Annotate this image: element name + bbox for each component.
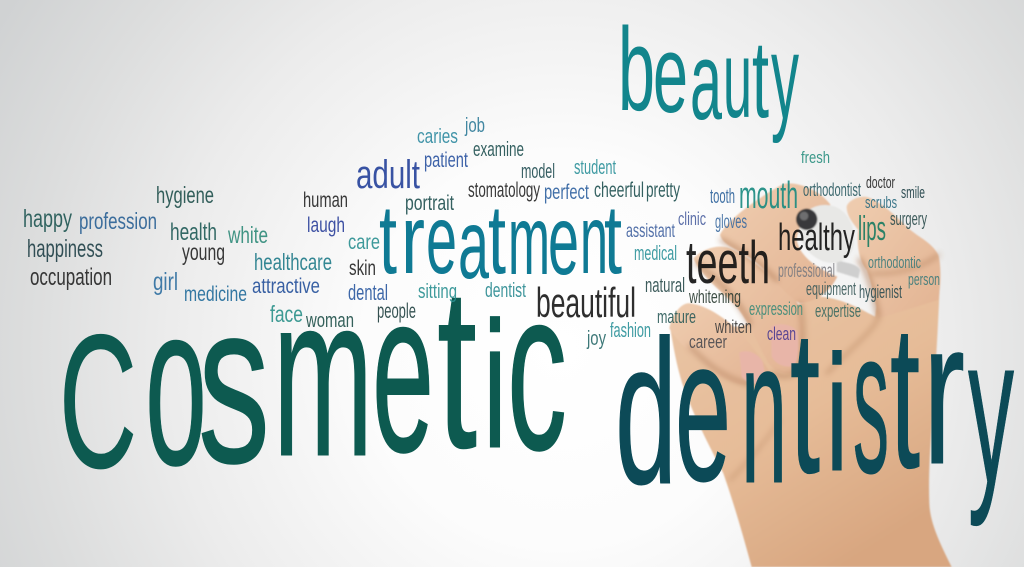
word: tooth: tooth <box>710 186 735 208</box>
word: care: care <box>348 231 380 254</box>
little finger <box>669 303 772 385</box>
word: whitening: whitening <box>688 287 741 307</box>
word: person: person <box>908 270 940 289</box>
word: white: white <box>227 222 268 248</box>
word: happiness: happiness <box>27 235 103 263</box>
word: job: job <box>464 115 485 137</box>
word: model: model <box>521 161 555 183</box>
word: medicine: medicine <box>184 283 247 306</box>
ring finger <box>693 247 803 373</box>
word: professional: professional <box>778 261 835 282</box>
word: portrait: portrait <box>405 192 454 215</box>
right finger <box>847 197 940 318</box>
heading: Cosmetic: C <box>59 296 137 508</box>
word: young: young <box>182 239 225 265</box>
word: mature: mature <box>657 307 696 327</box>
word: doctor: doctor <box>866 173 895 192</box>
heading: beauty: u <box>723 18 752 141</box>
word: laugh: laugh <box>307 214 345 237</box>
infographic: cosmetic dentistry word cloud written by a hand: y <box>771 10 799 144</box>
word: career: career <box>689 332 727 352</box>
word: stomatology: stomatology <box>468 179 540 202</box>
word: medical: medical <box>634 243 677 265</box>
word: mouth: mouth <box>739 175 798 217</box>
word: sitting: sitting <box>418 281 457 303</box>
heading: Cosmetic: s <box>198 254 270 511</box>
word: happy: happy <box>23 205 72 233</box>
word: hygiene: hygiene <box>156 182 214 208</box>
word: cheerful: cheerful <box>594 179 644 202</box>
word: beautiful: beautiful <box>536 279 636 326</box>
word: healthcare: healthcare <box>254 249 332 275</box>
heading: treatment: t <box>488 184 506 294</box>
heading: beauty: a <box>690 20 722 143</box>
word: orthodontic: orthodontic <box>868 253 921 272</box>
illustration: hand holding marker <box>669 183 952 567</box>
word: surgery: surgery <box>890 209 927 229</box>
heading: beauty: e <box>653 13 688 136</box>
word: pretty: pretty <box>646 179 680 202</box>
word: teeth: teeth <box>686 229 770 296</box>
word: fashion: fashion <box>610 320 651 342</box>
word: patient: patient <box>424 149 468 172</box>
heading: treatment: m <box>508 185 550 295</box>
heading: Cosmetic: e <box>372 243 434 500</box>
heading: dentistry: i <box>826 321 848 505</box>
word: occupation: occupation <box>30 264 112 291</box>
word: profession: profession <box>79 208 157 234</box>
word: people: people <box>377 300 416 323</box>
word: health: health <box>170 219 217 246</box>
fingernails <box>739 324 798 384</box>
word: joy: joy <box>586 328 606 350</box>
heading: dentistry: t <box>890 282 920 511</box>
word: dentist: dentist <box>485 280 526 302</box>
heading: treatment: t <box>379 184 397 294</box>
heading: dentistry: t <box>790 287 820 516</box>
word: expertise: expertise <box>815 301 861 321</box>
word: orthodontist: orthodontist <box>803 180 861 200</box>
word: fresh: fresh <box>801 148 830 167</box>
word: human: human <box>303 189 348 212</box>
word: lips: lips <box>858 210 886 248</box>
word: healthy: healthy <box>778 217 855 259</box>
heading: dentistry: s <box>853 287 889 516</box>
word: perfect: perfect <box>544 181 589 204</box>
heading: beauty: t <box>752 18 769 141</box>
word: skin: skin <box>349 257 376 280</box>
word: whiten: whiten <box>714 317 752 337</box>
heading: treatment: e <box>548 185 579 295</box>
word: woman: woman <box>305 310 354 332</box>
word: gloves: gloves <box>715 212 747 233</box>
heading: dentistry: n <box>741 297 787 526</box>
word: expression: expression <box>749 299 803 319</box>
heading: Cosmetic: t <box>437 239 477 496</box>
heading: beauty: b <box>618 4 655 136</box>
palm and wrist <box>670 277 952 567</box>
heading: Cosmetic: o <box>145 256 207 513</box>
heading: dentistry: r <box>923 278 965 507</box>
heading: Cosmetic: m <box>273 247 373 504</box>
heading: dentistry: e <box>675 295 731 524</box>
finger shading <box>690 240 938 480</box>
heading: treatment: n <box>580 184 608 294</box>
word: clean: clean <box>767 324 796 344</box>
heading: treatment: t <box>604 184 622 294</box>
word cloud: small words <box>23 115 940 352</box>
word: student: student <box>574 157 616 179</box>
word: hygienist: hygienist <box>859 282 902 302</box>
word: scrubs: scrubs <box>865 193 897 212</box>
heading: Cosmetic: i <box>483 285 507 486</box>
word: smile: smile <box>901 183 925 202</box>
marker cap <box>796 205 860 278</box>
word: attractive: attractive <box>252 275 320 298</box>
word: assistant: assistant <box>626 221 675 242</box>
heading: treatment: r <box>401 184 425 294</box>
word: face: face <box>270 301 303 327</box>
word: adult: adult <box>356 153 420 197</box>
word: dental: dental <box>348 280 388 305</box>
heading: Cosmetic: c <box>507 241 567 498</box>
heading: treatment: e <box>426 184 457 294</box>
word: equipment: equipment <box>806 279 856 299</box>
index finger <box>720 183 837 303</box>
heading: treatment: a <box>458 189 489 299</box>
word: natural: natural <box>645 275 685 297</box>
heading: dentistry: d <box>615 298 677 527</box>
word: clinic: clinic <box>678 209 706 229</box>
word: girl: girl <box>153 268 178 296</box>
word: examine: examine <box>473 139 524 161</box>
word: caries: caries <box>417 126 458 148</box>
